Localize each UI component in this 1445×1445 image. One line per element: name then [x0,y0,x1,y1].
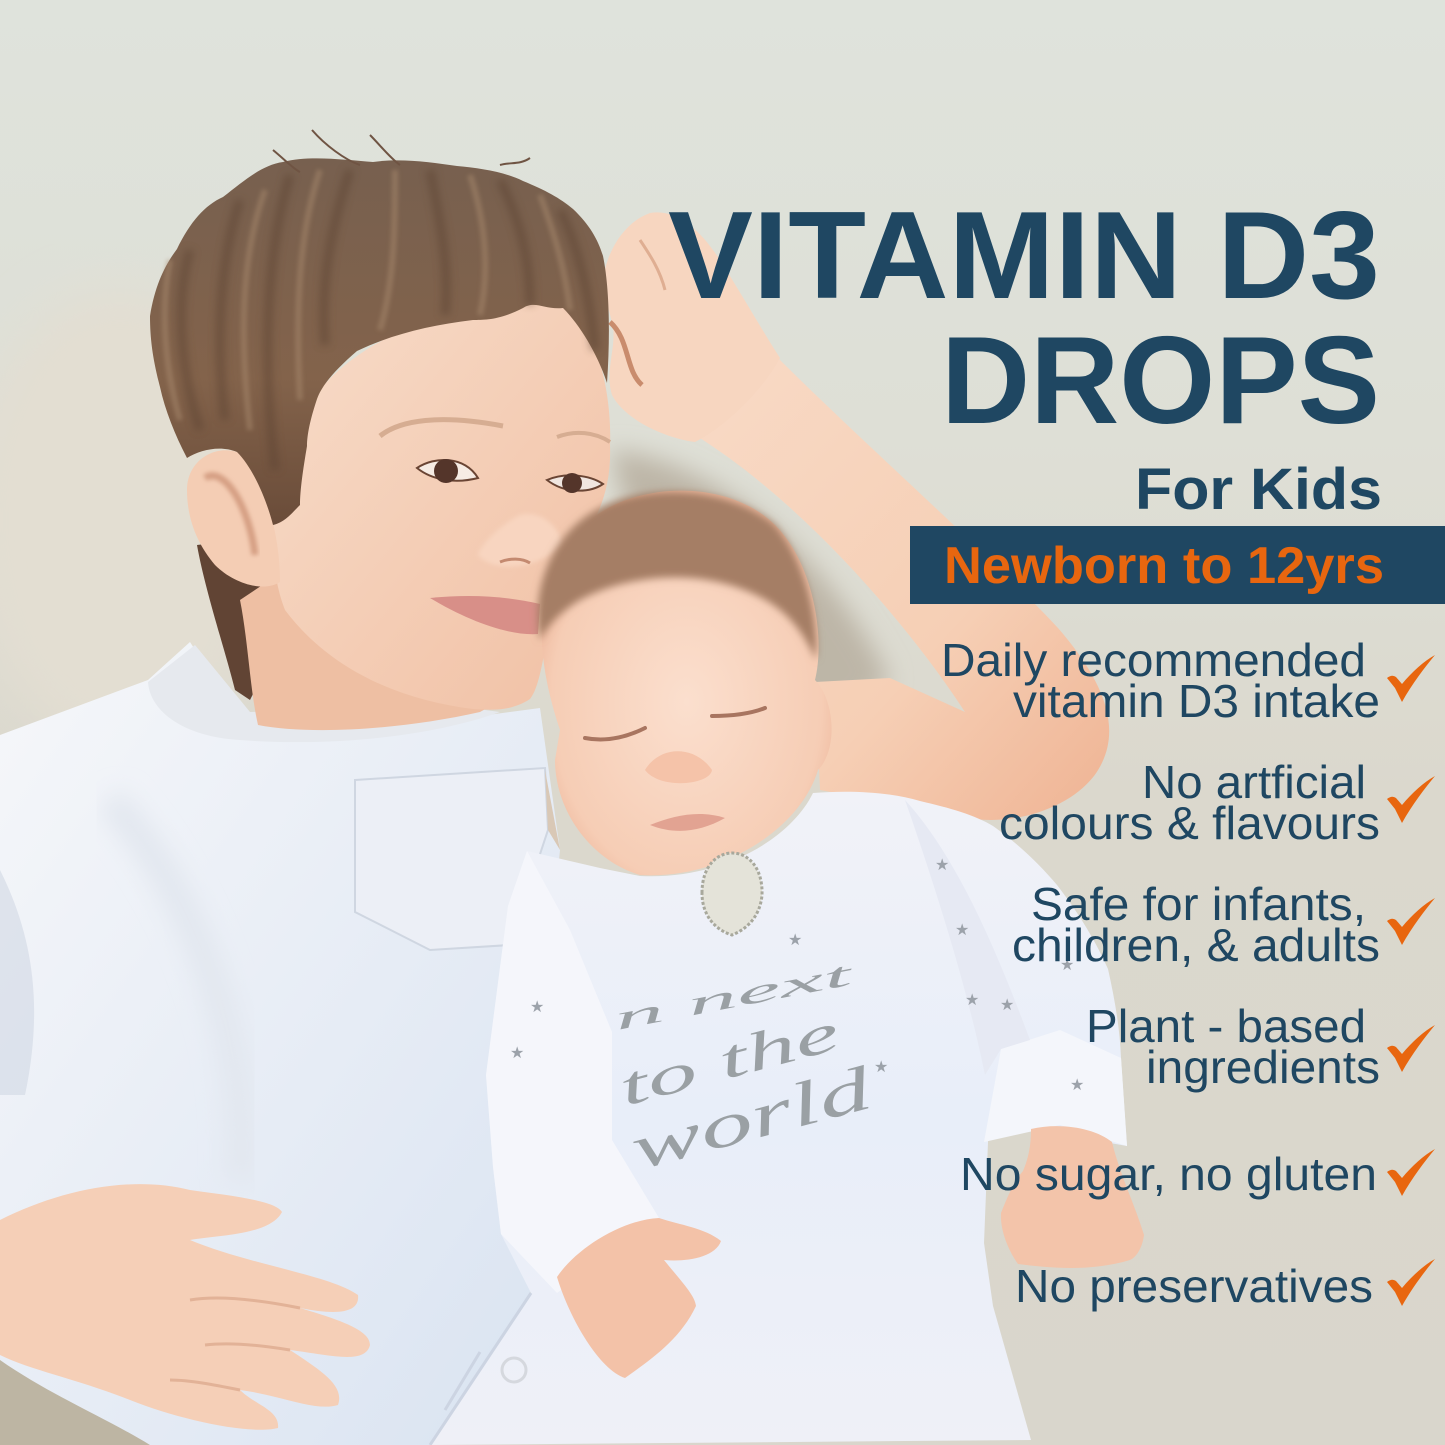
onesie lettering: world [624,1054,880,1184]
title [668,187,1380,450]
baby hand lower left [557,1218,721,1378]
baby hand right [1001,1126,1144,1268]
title: VITAMIN D3 [668,187,1380,325]
boy ear [187,450,280,587]
baby onesie [430,792,1127,1445]
onesie stars: ★ [1070,1077,1084,1094]
onesie stars: ★ [1000,997,1014,1014]
baby closed eyes [585,708,765,740]
title: DROPS [941,312,1380,450]
age banner: Newborn to 12yrs [944,537,1384,595]
subtitle: For Kids [1135,457,1382,522]
benefits list [941,634,1435,1312]
boy head [150,130,610,730]
onesie stars: ★ [955,922,969,939]
benefit 1: Daily recommended [941,634,1366,686]
onesie lettering: to the [613,1001,845,1118]
benefit 5: No sugar, no gluten [960,1148,1377,1200]
boy neck and hair tail [197,540,300,700]
warm shading on wall around boy [0,290,270,750]
boy shirt [0,642,560,1445]
age banner [910,526,1445,604]
benefit 6: No preservatives [1015,1260,1373,1312]
onesie stars: ★ [965,992,979,1009]
onesie stars: ★ [874,1059,888,1076]
benefit 1: vitamin D3 intake [1013,675,1380,727]
benefit 2 [999,756,1435,849]
benefit 4: ingredients [1146,1041,1380,1093]
photo: boy and baby [0,130,1144,1445]
benefit 2: colours & flavours [999,797,1380,849]
onesie stars: ★ [510,1045,524,1062]
benefit 2: No artficial [1142,756,1366,808]
onesie balloon patch [702,853,762,935]
baby hair [538,492,817,660]
shirt pocket [355,768,548,950]
onesie stars: ★ [935,857,949,874]
baby head [538,491,832,875]
onesie stars: ★ [530,999,544,1016]
benefit 3 [1012,878,1435,971]
onesie stars [510,857,1084,1094]
boy nose and mouth [430,514,563,634]
baby nose and mouth [645,751,725,831]
benefit 3: children, & adults [1012,919,1380,971]
soft shadow behind children [610,450,890,730]
benefit 4: Plant - based [1086,1000,1366,1052]
boy trousers [0,1360,150,1445]
onesie stars: ★ [1060,957,1074,974]
boy eyes and brows [380,420,610,493]
benefit 4 [1086,1000,1435,1093]
boy raised arm and hand [602,212,1109,820]
boy hand on baby [0,1184,370,1430]
benefit 3: Safe for infants, [1031,878,1366,930]
onesie lettering: n next [611,955,859,1038]
onesie stars: ★ [788,932,802,949]
boy hair [150,130,609,525]
benefit 1 [941,634,1435,727]
onesie lettering [611,955,880,1184]
